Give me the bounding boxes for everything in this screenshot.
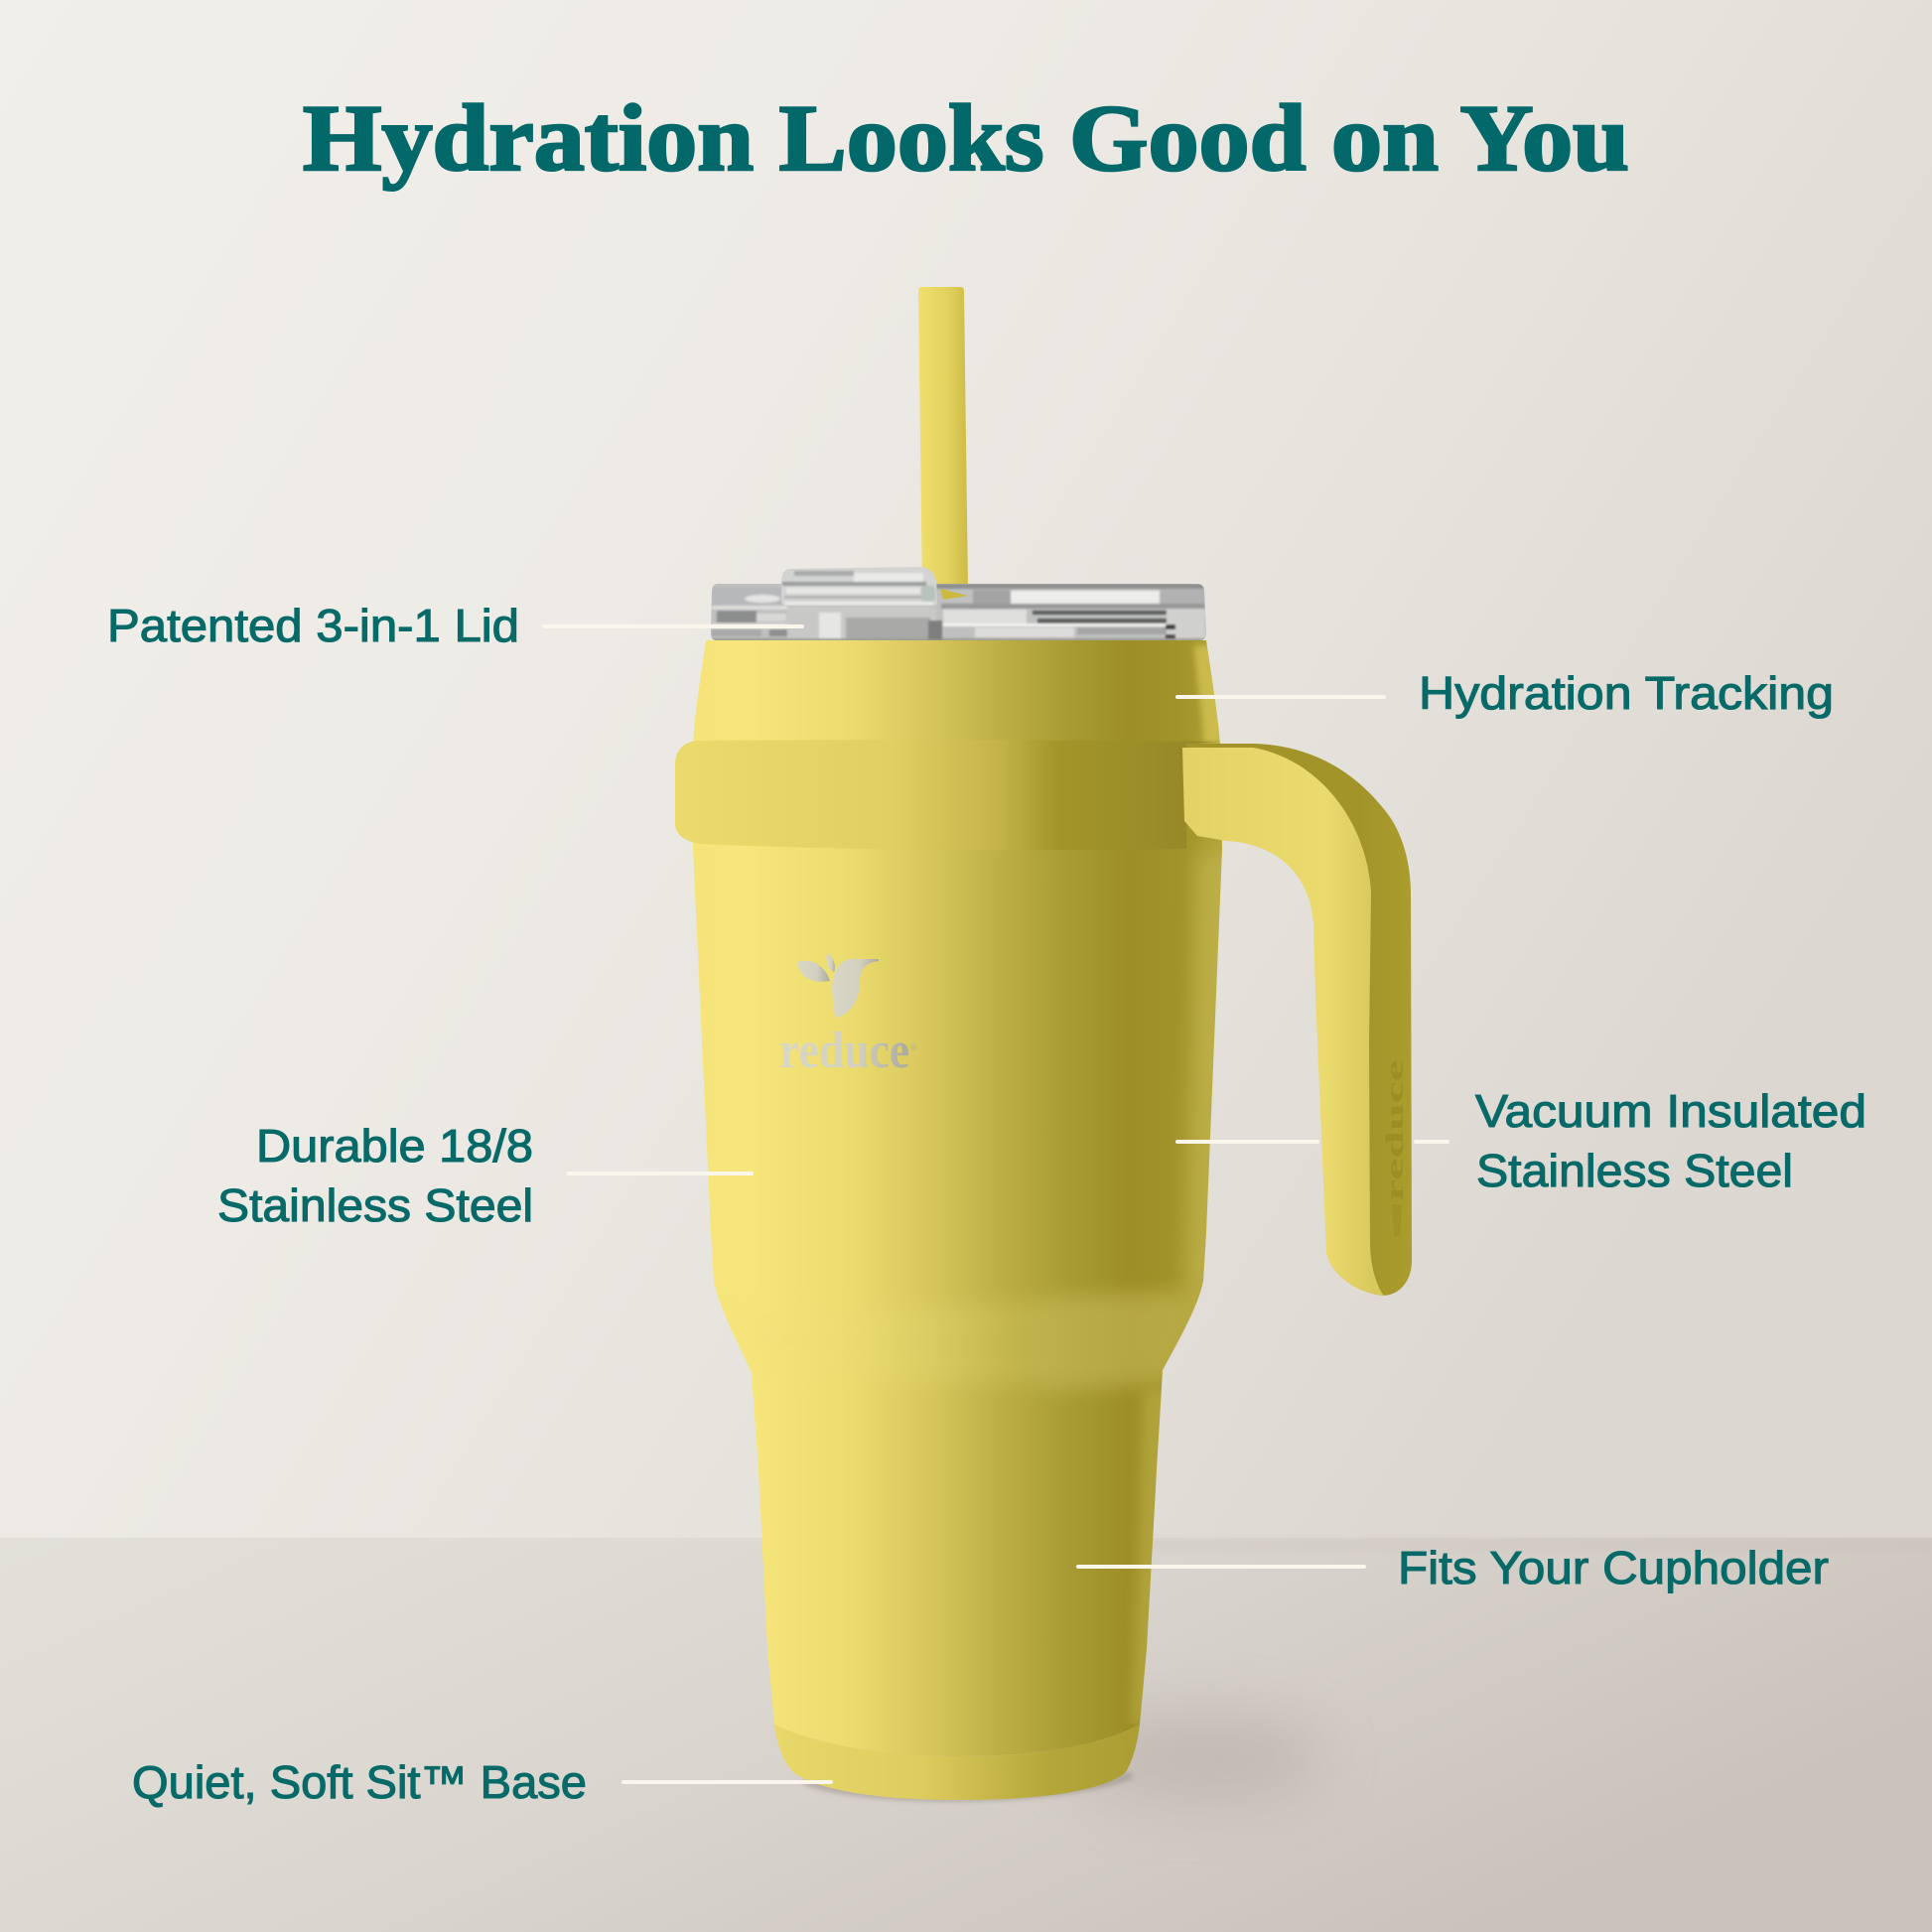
handle engraving: reduce [1382,1059,1409,1201]
straw [918,287,968,591]
logo mark [797,953,879,1018]
reduce logo [779,953,917,1079]
tumbler illustration [675,287,1412,1800]
handle front face [1182,748,1384,1296]
callout: vacuum insulated stainless steel: Stainless Steel [1476,1145,1793,1196]
right upper band [936,584,1206,589]
callout: durable stainless steel: Stainless Steel [217,1179,533,1231]
lid rim [709,582,1209,643]
callout: fits your cupholder: Fits Your Cupholder [1398,1542,1829,1593]
right lower band [943,610,1027,623]
soft sit base [774,1725,1140,1800]
tumbler body [693,640,1222,1756]
callout: soft sit base: Quiet, Soft Sit™ Base [132,1756,587,1808]
slide button [781,567,937,606]
title: Hydration Looks Good on You [303,85,1629,191]
below button [787,607,936,640]
logo wordmark: reduce [779,1023,909,1079]
body contour shading [725,645,1231,1725]
handle engraving [1382,1059,1409,1236]
callout: vacuum insulated stainless steel: Vacuum Insulated [1475,1085,1866,1137]
callout: vacuum insulated stainless steel [1177,1085,1866,1196]
callout: hydration tracking: Hydration Tracking [1419,667,1834,719]
registered mark: ® [910,1042,917,1052]
carry collar [675,740,1220,850]
callout: durable stainless steel [217,1120,752,1231]
left side of rim [712,588,781,606]
callout: durable stainless steel: Durable 18/8 [256,1120,533,1172]
patented lid [709,567,1209,643]
handle [1182,744,1412,1296]
callout: patented lid: Patented 3-in-1 Lid [107,600,519,651]
handle side face [1182,744,1412,1296]
yellow straw port [940,589,968,600]
